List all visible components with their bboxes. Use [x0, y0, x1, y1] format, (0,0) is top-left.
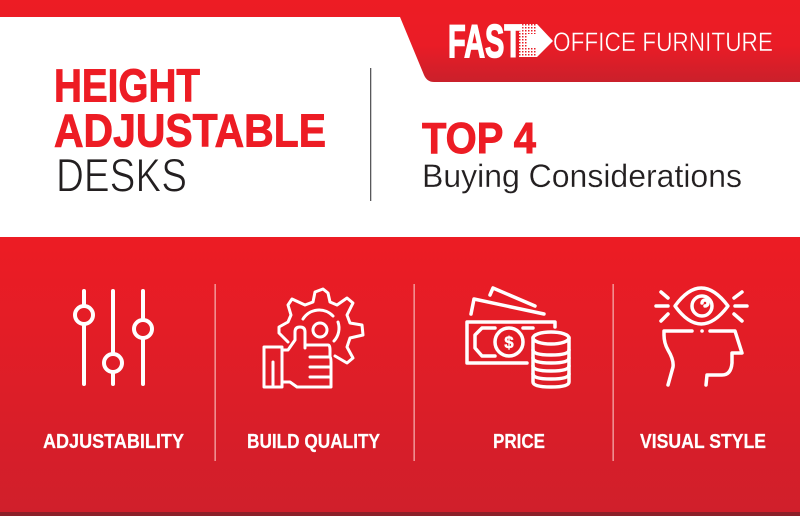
subtitle: [422, 114, 742, 194]
subtitle: Buying Considerations: Buying Considerations: [422, 158, 742, 194]
header divider: [370, 68, 371, 201]
icon: gear and fist: [264, 289, 363, 387]
icon: eye and head: [656, 288, 747, 385]
title line: ADJUSTABLE: ADJUSTABLE: [54, 104, 326, 156]
logo wordmark FAST: FAST: [448, 15, 522, 67]
title line: HEIGHT: HEIGHT: [54, 60, 200, 112]
label: price: PRICE: [493, 430, 545, 453]
icon: money and coins: [467, 288, 569, 387]
label: build quality: BUILD QUALITY: [247, 430, 380, 453]
subtitle: TOP 4: TOP 4: [422, 114, 536, 163]
icon glyph: dollar: $: [504, 333, 514, 352]
logo: [448, 15, 773, 67]
logo arrow: [519, 24, 553, 57]
panel: considerations: [0, 237, 800, 516]
header banner: [0, 0, 800, 82]
label: visual style: VISUAL STYLE: [640, 430, 766, 453]
title: [54, 60, 326, 202]
label: adjustability: ADJUSTABILITY: [43, 430, 184, 453]
title line: DESKS: DESKS: [56, 148, 187, 202]
icon: sliders: [75, 291, 152, 384]
